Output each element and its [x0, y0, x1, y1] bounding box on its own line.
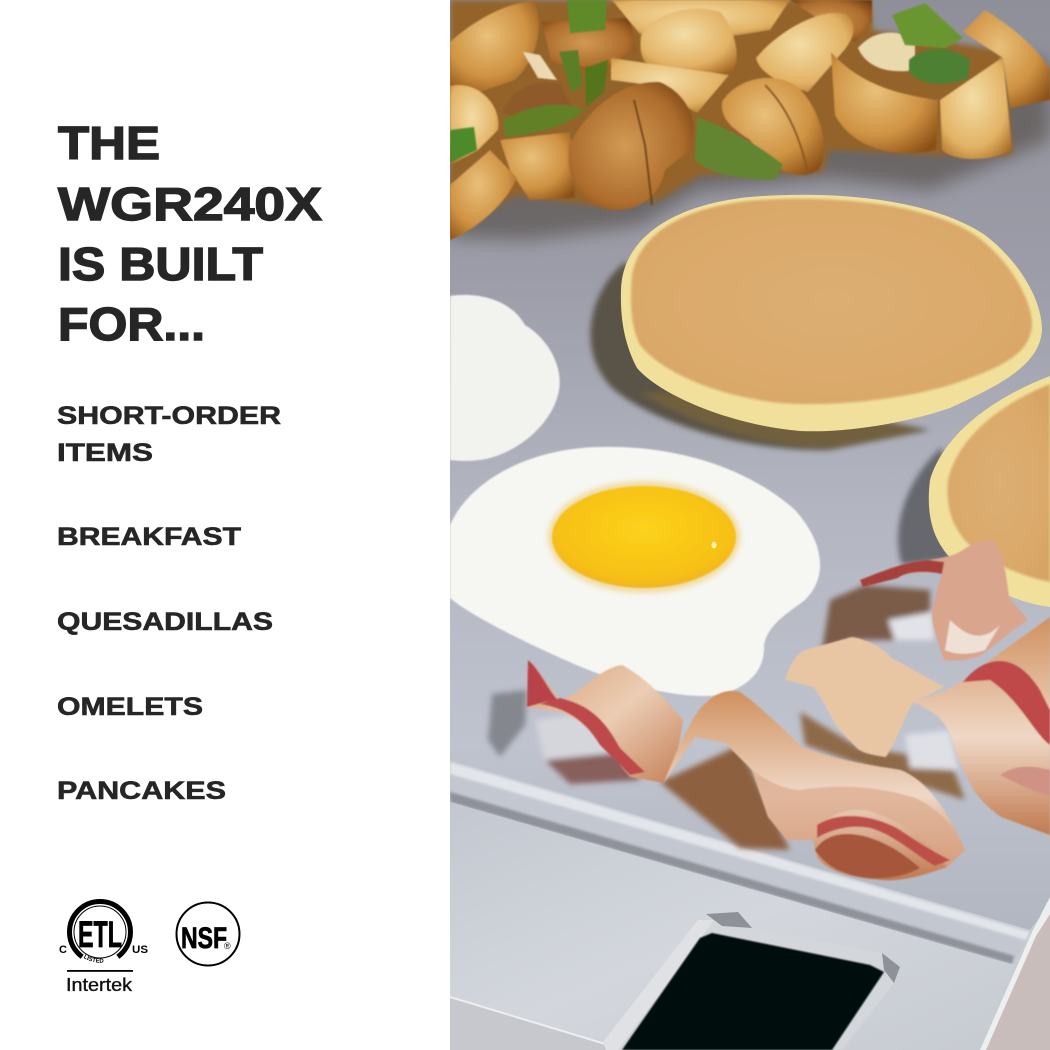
use-case list: SHORT-ORDER [57, 402, 281, 430]
icon: ETL Intertek certification: LISTED [84, 954, 104, 963]
side wall [980, 897, 1050, 1050]
use-case list: PANCAKES [57, 777, 226, 805]
use-case list: ITEMS [57, 439, 153, 467]
bacon strips [527, 539, 1050, 880]
title [58, 117, 322, 350]
potatoes base [450, 0, 1012, 235]
strip two [664, 691, 965, 880]
title: WGR240X [58, 178, 322, 230]
left white panel [0, 0, 450, 1050]
icon: NSF certification: ® [224, 941, 231, 951]
griddle photo [450, 0, 1050, 1050]
bacon shadows [488, 585, 965, 850]
use-case list: QUESADILLAS [57, 608, 273, 636]
griddle cooking surface [450, 0, 1050, 930]
main pancake [621, 195, 1042, 431]
strip five [908, 539, 1028, 662]
icon: NSF certification: NSF [181, 922, 227, 955]
use-case list [57, 402, 281, 805]
strip one [527, 660, 683, 783]
strip four [913, 617, 1050, 835]
use-case list: OMELETS [57, 693, 203, 721]
icon: ETL Intertek certification: Intertek [66, 975, 133, 995]
potatoes [450, 0, 1050, 240]
title: IS BUILT [58, 238, 263, 290]
icon: ETL Intertek certification [59, 899, 148, 995]
left egg white [450, 295, 560, 461]
icon: NSF certification [176, 902, 240, 966]
title: FOR... [58, 298, 205, 350]
griddle front lip [450, 760, 1032, 964]
icon: ETL Intertek certification: ETL [78, 914, 122, 955]
right pancake shadow [898, 447, 950, 565]
icon: ETL Intertek certification: C [59, 944, 67, 956]
green peppers [450, 0, 970, 180]
strip three [785, 637, 944, 757]
icon: ETL Intertek certification: US [132, 944, 148, 956]
drain slot [603, 912, 900, 1050]
right pancake [929, 376, 1050, 607]
front panel [450, 802, 1014, 1050]
lower edge strip [450, 997, 618, 1050]
title: THE [58, 117, 160, 169]
fried egg [450, 447, 820, 696]
shadows under potatoes [450, 60, 1050, 240]
use-case list: BREAKFAST [57, 523, 241, 551]
pancake shadow [591, 262, 930, 450]
